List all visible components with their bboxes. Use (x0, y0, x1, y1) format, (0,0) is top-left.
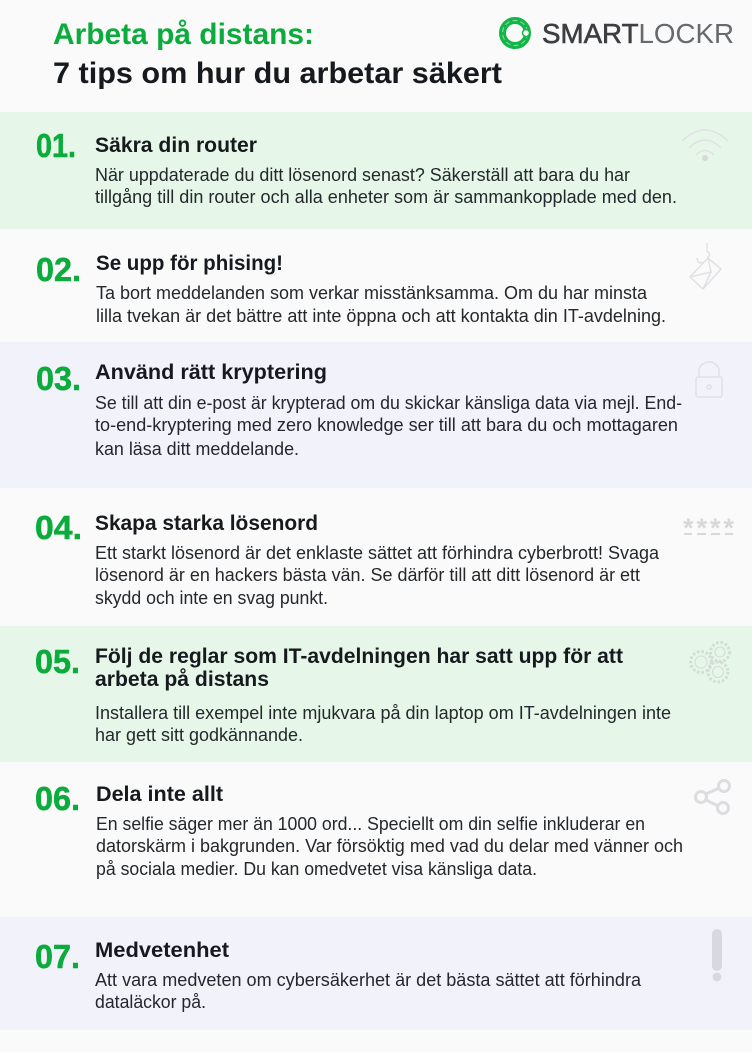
title: Arbeta på distans: (53, 18, 314, 51)
heading: Använd rätt kryptering (95, 361, 327, 384)
number 02: 02. (36, 251, 81, 288)
body text: tillgång till din router och alla enheter som är sammankopplade med den. (95, 186, 677, 207)
body text: Ett starkt lösenord är det enklaste sättet att förhindra cyberbrott! Svaga (95, 542, 660, 563)
panel: tip 5 (0, 626, 752, 762)
body text: Se till att din e-post är krypterad om du skickar känsliga data via mejl. End- (95, 392, 682, 413)
number 06: 06. (35, 780, 80, 817)
number 07: 07. (35, 938, 80, 975)
heading: Säkra din router (95, 134, 257, 157)
body text: lilla tvekan är det bättre att inte öppna och att kontakta din IT-avdelning. (96, 305, 666, 326)
panel: tip 6 (35, 780, 730, 879)
heading: Följ de reglar som IT-avdelningen har satt upp för att (95, 645, 623, 668)
heading: Dela inte allt (96, 783, 223, 806)
body text: på sociala medier. Du kan omedvetet visa känsliga data. (96, 858, 537, 879)
body text: En selfie säger mer än 1000 ord... Speciellt om din selfie inkluderar en (96, 813, 645, 834)
body text (95, 702, 671, 745)
body text (96, 813, 683, 879)
body text: Ta bort meddelanden som verkar misstänksamma. Om du har minsta (96, 282, 648, 303)
icon: gears (690, 642, 730, 682)
icon: password asterisks: **** (683, 513, 734, 543)
icon: share (696, 780, 730, 814)
body text (95, 392, 682, 459)
panel: tip 2 (36, 243, 721, 326)
body text: skydd och inte en svag punkt. (95, 587, 328, 608)
heading: Skapa starka lösenord (95, 512, 318, 535)
panel: tip 3 (0, 342, 752, 488)
body text: När uppdaterade du ditt lösenord senast? Säkerställ att bara du har (95, 164, 630, 185)
body text: lösenord är en hackers bästa vän. Se därför till att ditt lösenord är ett (95, 564, 640, 585)
body text (95, 542, 660, 608)
number 03: 03. (36, 360, 81, 397)
body text (95, 969, 642, 1012)
number 01: 01. (36, 127, 76, 164)
body text (95, 164, 677, 207)
panel: tip 1 (0, 112, 752, 229)
heading: Se upp för phising! (96, 252, 283, 275)
number 05: 05. (35, 643, 80, 680)
body text: Att vara medveten om cybersäkerhet är det bästa sättet att förhindra (95, 969, 642, 990)
icon: exclamation mark (712, 929, 722, 982)
icon: wifi (682, 130, 728, 161)
panel: tip 4 (35, 509, 734, 608)
body text (96, 282, 666, 326)
body text: dataläckor på. (95, 991, 206, 1012)
heading: arbeta på distans (95, 668, 269, 691)
number 04: 04. (35, 509, 82, 546)
body text: to-end-kryptering med zero knowledge ser till att bara du och mottagaren (95, 414, 678, 435)
body text: datorskärm i bakgrunden. Var försöktig med vad du delar med vänner och (96, 835, 683, 856)
body text: har gett sitt godkännande. (95, 724, 303, 745)
icon: padlock (696, 362, 722, 397)
panel: tip 7 (0, 917, 752, 1030)
body text: Installera till exempel inte mjukvara på din laptop om IT-avdelningen inte (95, 702, 671, 723)
title: 7 tips om hur du arbetar säkert (53, 57, 502, 90)
logo: SmartLockr: SMARTLOCKR (542, 18, 734, 49)
heading: Medvetenhet (95, 939, 229, 962)
icon: phishing envelope (690, 243, 721, 289)
title (53, 18, 502, 90)
heading (95, 645, 623, 691)
body text: kan läsa ditt meddelande. (95, 438, 299, 459)
